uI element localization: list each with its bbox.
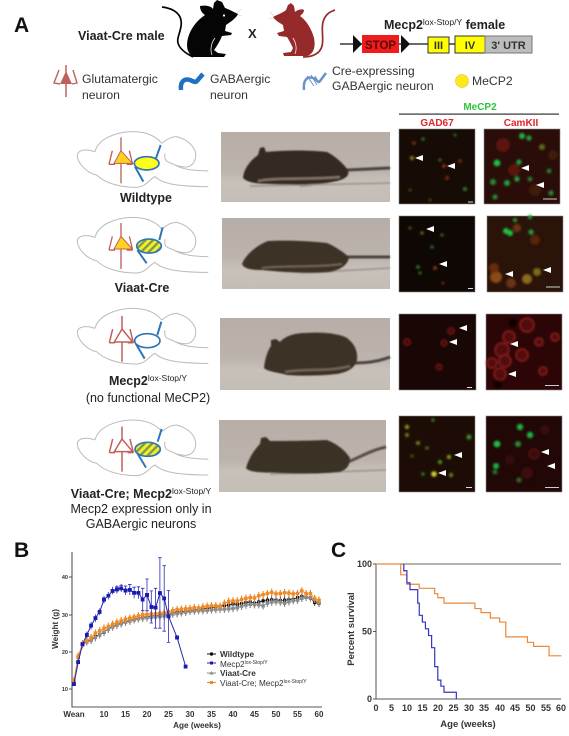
x-axis tick labels: 55 [541, 703, 551, 713]
curve: Mecp2 lox-Stop/Y [404, 564, 456, 699]
x-axis title: Age (weeks) [173, 721, 221, 730]
x-axis tick labels: 5 [389, 703, 394, 713]
text: Glutamatergic neuron: Glutamatergic [82, 72, 158, 86]
micrograph column headers: GAD67 [420, 118, 454, 129]
x-axis tick labels: 25 [164, 710, 173, 719]
x-axis tick labels: 10 [100, 710, 109, 719]
caption: Viaat-Cre; Mecp2 lox-Stop/Y, expression only in GABAergic neurons: Viaat-Cre; Mecp2 [71, 487, 172, 501]
micrograph: wildtype GAD67 [399, 129, 475, 204]
legend item: Viaat-Cre; Mecp2 lox-Stop/Y: lox-Stop/Y [284, 679, 307, 685]
x-axis tick labels: 35 [207, 710, 216, 719]
photo: Mecp2 lox-Stop/Y mouse [220, 318, 390, 390]
x-axis tick labels: 0 [373, 703, 379, 713]
gene construct diagram: STOP [365, 40, 396, 52]
micrograph: Viaat-Cre GAD67 [399, 216, 475, 292]
x-axis tick labels: 15 [121, 710, 130, 719]
y-axis tick labels: 10 [62, 687, 68, 693]
series: Mecp2 lox-Stop/Y [74, 588, 186, 684]
x-axis tick labels: 50 [525, 703, 536, 713]
x-axis title: Age (weeks) [440, 719, 496, 730]
micrograph: rescue CamKII [486, 416, 562, 492]
micrograph: Viaat-Cre CamKII [487, 215, 563, 292]
micrograph column headers: MeCP2 [463, 102, 497, 113]
x-axis tick labels [373, 703, 566, 713]
curve: wildtype and Viaat-Cre 100 percent [376, 563, 561, 565]
cross header: breeding scheme [78, 0, 532, 57]
y-axis tick labels: 30 [62, 613, 68, 619]
row: Viaat-Cre; Mecp2 lox-Stop/Y [70, 416, 562, 531]
icon: Cre-expressing GABAergic neuron [304, 73, 326, 90]
caption: Mecp2 lox-Stop/Y, no functional MeCP2: Mecp2 [109, 374, 148, 388]
gene construct diagram [340, 35, 532, 53]
micrograph: Mecp2 lox-Stop/Y CamKII [486, 314, 562, 390]
gene construct diagram: 3' UTR [491, 40, 526, 52]
caption: Mecp2 lox-Stop/Y, no functional MeCP2: lox-Stop/Y [148, 373, 187, 383]
caption: Viaat-Cre: Viaat-Cre [115, 281, 169, 295]
x-axis tick labels: 15 [417, 703, 428, 713]
row: Mecp2 lox-Stop/Y [77, 308, 562, 405]
brain schematic: Viaat-Cre [77, 217, 208, 273]
row: Viaat-Cre [77, 215, 563, 295]
x-axis tick labels: 10 [402, 703, 412, 713]
panel label A: A [14, 14, 29, 37]
legend item: Viaat-Cre; Mecp2 lox-Stop/Y: Viaat-Cre; Mecp2 [220, 679, 284, 688]
y-axis tick labels: 100 [357, 559, 372, 569]
micrograph: Mecp2 lox-Stop/Y GAD67 [399, 314, 476, 390]
x-axis tick labels: 35 [479, 703, 489, 713]
axes and tick marks [69, 552, 322, 707]
text: MeCP2: MeCP2 [472, 74, 513, 88]
chart: survival curve [346, 559, 566, 730]
text: GABAergic neuron: neuron [210, 88, 248, 102]
axes and ticks [373, 564, 561, 699]
x-axis tick labels: 50 [272, 710, 281, 719]
y-axis title: Weight (g) [51, 609, 60, 649]
photo: Viaat-Cre mouse [222, 218, 390, 289]
caption: Mecp2 lox-Stop/Y, no functional MeCP2: (no functional MeCP2) [86, 391, 210, 405]
brain schematic: Mecp2 lox-Stop/Y [77, 308, 208, 364]
x-axis tick labels: 60 [315, 710, 324, 719]
y-axis tick labels: 20 [62, 650, 68, 656]
x-axis tick labels [63, 710, 324, 719]
x-axis tick labels: 30 [186, 710, 195, 719]
curve: Viaat-Cre; Mecp2 lox-Stop/Y [376, 564, 561, 656]
x-axis tick labels: 30 [464, 703, 474, 713]
text: Cre-expressing GABAergic neuron: Cre-expressing [332, 64, 415, 78]
x-axis tick labels: 25 [448, 703, 459, 713]
micrograph column headers: CamKII [504, 118, 538, 129]
x-axis tick labels: 20 [143, 710, 152, 719]
y-axis tick labels: 50 [362, 626, 372, 636]
caption: Viaat-Cre; Mecp2 lox-Stop/Y, expression only in GABAergic neurons: lox-Stop/Y [172, 486, 212, 496]
gene construct diagram: III [434, 40, 443, 52]
legend: cell types [54, 64, 513, 102]
label: Mecp2 lox-Stop/Y female: Mecp2 [384, 18, 423, 32]
label: Viaat-Cre male: Viaat-Cre male [78, 29, 165, 43]
series: Viaat-Cre [74, 597, 319, 682]
legend item: Mecp2 lox-Stop/Y: lox-Stop/Y [245, 660, 268, 666]
micrograph: wildtype CamKII [484, 129, 560, 204]
micrograph column headers [399, 102, 559, 129]
x-axis tick labels: 55 [293, 710, 302, 719]
cross symbol X: X [248, 26, 257, 41]
legend item: Viaat-Cre; Mecp2 lox-Stop/Y [207, 679, 307, 688]
y-axis tick labels: 40 [62, 575, 68, 581]
legend item: Viaat-Cre: Viaat-Cre [220, 669, 256, 678]
panel label C: C [331, 539, 346, 562]
caption: Wildtype: Wildtype [120, 191, 172, 205]
series: wildtype [74, 596, 319, 682]
label: Mecp2 lox-Stop/Y female: female [462, 18, 505, 32]
x-axis tick labels: 45 [510, 703, 520, 713]
x-axis tick labels: 20 [433, 703, 443, 713]
gene construct diagram: IV [465, 40, 476, 52]
y-axis title: Percent survival [346, 592, 357, 666]
x-axis tick labels: Wean [63, 710, 85, 719]
legend item: Wildtype: Wildtype [220, 650, 254, 659]
brain schematic: wildtype [77, 132, 208, 187]
icon: red female mouse [269, 3, 335, 57]
text: GABAergic neuron: GABAergic [210, 72, 270, 86]
x-axis tick labels: 40 [495, 703, 505, 713]
panel label B: B [14, 539, 29, 562]
series: Viaat-Cre; Mecp2 lox-Stop/Y [74, 591, 319, 680]
chart: weight by age [51, 552, 324, 730]
legend item: Mecp2 lox-Stop/Y: Mecp2 [220, 660, 245, 669]
y-axis tick labels: 0 [367, 694, 372, 704]
legend item: Mecp2 lox-Stop/Y [207, 660, 268, 669]
chart legend [207, 650, 307, 688]
caption: Viaat-Cre; Mecp2 lox-Stop/Y, expression only in GABAergic neurons: Mecp2 expression only in [70, 502, 212, 516]
x-axis tick labels: 45 [250, 710, 259, 719]
caption: Viaat-Cre; Mecp2 lox-Stop/Y, expression only in GABAergic neurons: GABAergic neurons [86, 517, 196, 531]
icon: black male mouse [162, 0, 242, 57]
text: Glutamatergic neuron: neuron [82, 88, 120, 102]
text: Cre-expressing GABAergic neuron: GABAergic neuron [332, 79, 434, 93]
icon: MeCP2 dot [456, 74, 468, 88]
brain schematic: rescue [77, 420, 208, 476]
row: Wildtype [77, 129, 560, 205]
series: Mecp2 lox-Stop/Y error bars [87, 558, 170, 642]
photo: rescue mouse [219, 420, 386, 492]
label: Mecp2 lox-Stop/Y female: lox-Stop/Y [423, 17, 462, 27]
x-axis tick labels: 60 [556, 703, 566, 713]
micrograph: rescue GAD67 [399, 416, 475, 492]
x-axis tick labels: 40 [229, 710, 238, 719]
icon: glutamatergic neuron [54, 65, 77, 97]
photo: wildtype mouse [221, 132, 390, 202]
y-axis tick labels [357, 559, 372, 704]
icon: GABAergic neuron [181, 74, 203, 90]
y-axis tick labels [62, 575, 68, 693]
